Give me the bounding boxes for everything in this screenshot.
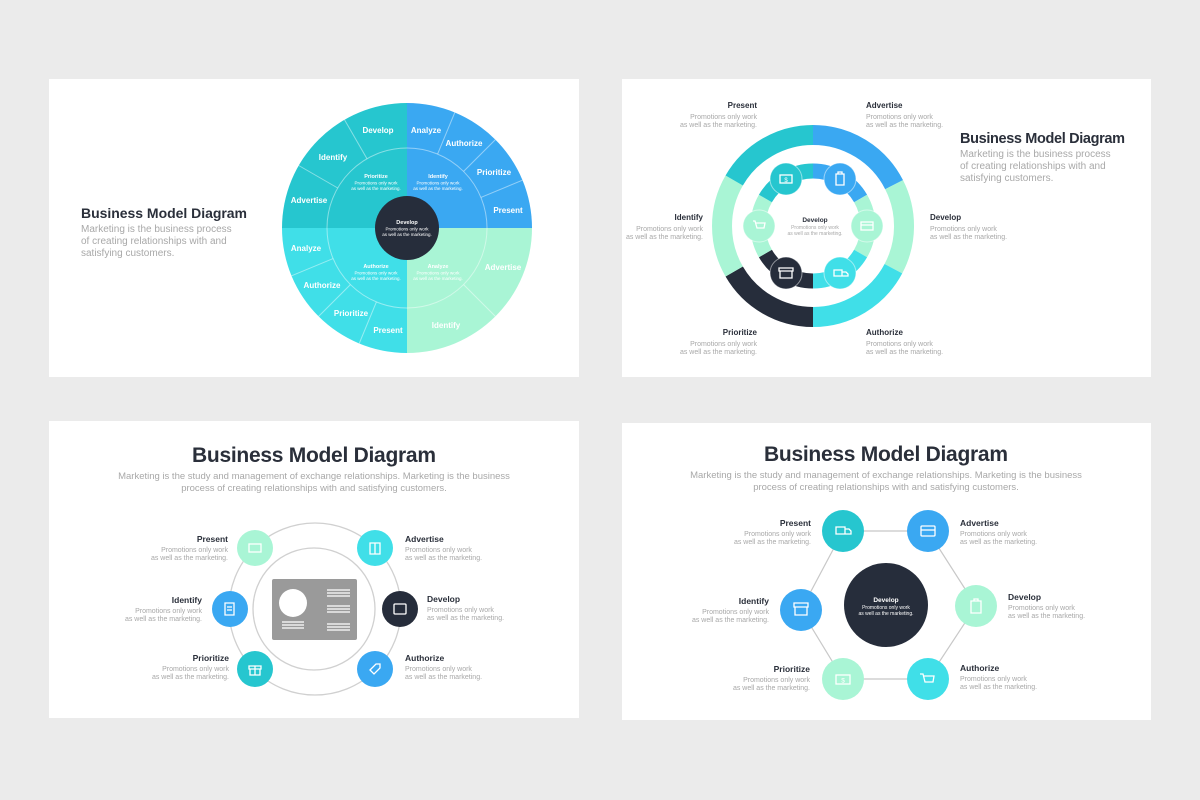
center circle: develop: Develop <box>396 220 418 226</box>
center label: ring: Promotions only work <box>791 225 839 231</box>
panel: hexagon diagram <box>622 423 1151 720</box>
labels: cycle: Promotions only work <box>161 547 228 554</box>
center label: ring <box>787 217 843 237</box>
panel: circle cycle diagram <box>49 421 579 718</box>
chart: wheel: Identify <box>428 174 449 180</box>
labels: ring: as well as the marketing. <box>680 349 757 356</box>
labels: hexagon: Promotions only work <box>702 609 769 616</box>
labels: ring: Promotions only work <box>636 226 703 233</box>
center circle: develop: Promotions only work <box>385 226 429 232</box>
chart: wheel: Analyze <box>291 244 322 253</box>
labels: hexagon: as well as the marketing. <box>960 684 1037 691</box>
chart: wheel: Authorize <box>304 281 341 290</box>
labels: ring: as well as the marketing. <box>626 234 703 241</box>
center label: ring: as well as the marketing. <box>787 231 843 237</box>
labels: hexagon: as well as the marketing. <box>733 685 810 692</box>
center circle: hexagon: Promotions only work <box>862 605 910 611</box>
heading: cycle panel: Marketing is the study and management of exchange relationships. Marketing is the business <box>118 471 510 482</box>
illustration: gray card <box>272 579 357 640</box>
chart: wheel: as well as the marketing. <box>351 186 401 191</box>
labels: hexagon: Promotions only work <box>1008 605 1075 612</box>
labels: ring: as well as the marketing. <box>680 122 757 129</box>
labels: ring <box>626 101 1007 356</box>
heading: wheel panel: Marketing is the business process <box>81 224 232 235</box>
labels: cycle: Promotions only work <box>427 607 494 614</box>
heading: cycle panel <box>118 444 510 494</box>
icon nodes: hexagon: $ <box>841 678 845 684</box>
labels: hexagon <box>692 518 1085 692</box>
labels: cycle: Develop <box>427 594 460 604</box>
labels: hexagon: Prioritize <box>774 664 810 674</box>
labels: hexagon: as well as the marketing. <box>1008 613 1085 620</box>
labels: cycle: as well as the marketing. <box>405 555 482 562</box>
heading: wheel panel: of creating relationships with and <box>81 236 227 247</box>
heading: cycle panel: Business Model Diagram <box>192 444 436 467</box>
center circle: develop: as well as the marketing. <box>382 232 432 237</box>
labels: ring: Identify <box>675 213 704 222</box>
labels: cycle: Promotions only work <box>135 608 202 615</box>
heading: hexagon panel: process of creating relationships with and satisfying customers. <box>753 482 1019 493</box>
labels: hexagon: Promotions only work <box>743 677 810 684</box>
chart: wheel: Promotions only work <box>354 180 398 186</box>
labels: ring: Promotions only work <box>866 341 933 348</box>
chart: wheel: Prioritize <box>334 309 369 318</box>
panel: ring diagram <box>622 79 1151 377</box>
chart: wheel: Identify <box>319 153 348 162</box>
labels: ring: Promotions only work <box>690 341 757 348</box>
labels: ring: Develop <box>930 213 961 222</box>
labels: hexagon: Promotions only work <box>960 676 1027 683</box>
center circle: hexagon: Develop <box>873 597 899 604</box>
labels: cycle: Prioritize <box>193 653 229 663</box>
labels: cycle: as well as the marketing. <box>427 615 504 622</box>
heading: ring panel: of creating relationships with and <box>960 161 1106 172</box>
labels: hexagon: as well as the marketing. <box>734 539 811 546</box>
labels: hexagon: Advertise <box>960 518 999 528</box>
labels: cycle: Present <box>197 534 228 544</box>
labels: ring: Promotions only work <box>930 226 997 233</box>
labels: hexagon: Promotions only work <box>960 531 1027 538</box>
chart: wheel: Prioritize <box>477 168 512 177</box>
chart: cycle circles <box>229 523 401 695</box>
chart: wheel: Develop <box>362 126 394 135</box>
chart: wheel: Analyze <box>411 126 442 135</box>
labels: hexagon: as well as the marketing. <box>960 539 1037 546</box>
icon nodes: cycle <box>212 530 418 687</box>
labels: cycle: as well as the marketing. <box>405 674 482 681</box>
panel: ring diagram: $ <box>784 178 788 184</box>
icon nodes: hexagon <box>780 510 997 700</box>
labels: ring: Promotions only work <box>866 114 933 121</box>
labels: cycle: Promotions only work <box>405 666 472 673</box>
labels: ring: as well as the marketing. <box>866 349 943 356</box>
labels: ring: Advertise <box>866 101 903 110</box>
labels: ring: as well as the marketing. <box>930 234 1007 241</box>
heading: ring panel: Business Model Diagram <box>960 131 1125 147</box>
chart: wheel: Promotions only work <box>416 180 460 186</box>
labels: cycle: as well as the marketing. <box>125 616 202 623</box>
labels: hexagon: Authorize <box>960 663 999 673</box>
chart: wheel: Present <box>493 206 523 215</box>
chart: wheel: Prioritize <box>364 174 388 180</box>
chart: wheel: Identify <box>432 321 461 330</box>
chart: wheel: Advertise <box>291 196 328 205</box>
labels: cycle <box>125 534 504 681</box>
labels: hexagon: Present <box>780 518 811 528</box>
labels: ring: Present <box>728 101 757 110</box>
chart: wheel: as well as the marketing. <box>413 276 463 281</box>
panel: wheel diagram <box>49 79 579 377</box>
chart: wheel: Authorize <box>363 264 389 270</box>
labels: hexagon: Identify <box>739 596 769 606</box>
heading: cycle panel: process of creating relationships with and satisfying customers. <box>181 483 447 494</box>
heading: hexagon panel: Business Model Diagram <box>764 443 1008 466</box>
center label: ring: Develop <box>802 217 828 224</box>
labels: cycle: Authorize <box>405 653 444 663</box>
chart: wheel: Authorize <box>446 139 483 148</box>
chart: outer ring <box>722 135 904 317</box>
heading: hexagon panel <box>690 443 1082 493</box>
center circle: develop <box>375 196 439 260</box>
labels: hexagon: Develop <box>1008 592 1041 602</box>
labels: ring: Prioritize <box>723 328 758 337</box>
heading: wheel panel <box>81 205 247 259</box>
heading: ring panel: Marketing is the business process <box>960 149 1111 160</box>
chart: hexagon lines <box>801 531 976 679</box>
labels: ring: Authorize <box>866 328 903 337</box>
chart: wheel: as well as the marketing. <box>351 276 401 281</box>
labels: hexagon: as well as the marketing. <box>692 617 769 624</box>
icon nodes: ring <box>743 163 883 289</box>
chart: wheel <box>282 103 532 353</box>
labels: cycle: Identify <box>172 595 202 605</box>
chart: wheel: Present <box>373 326 403 335</box>
labels: ring: Promotions only work <box>690 114 757 121</box>
labels: ring: as well as the marketing. <box>866 122 943 129</box>
labels: hexagon: Promotions only work <box>744 531 811 538</box>
heading: wheel panel: satisfying customers. <box>81 248 174 259</box>
labels: cycle: Advertise <box>405 534 444 544</box>
labels: cycle: Promotions only work <box>162 666 229 673</box>
heading: ring panel: satisfying customers. <box>960 173 1053 184</box>
chart: wheel: as well as the marketing. <box>413 186 463 191</box>
center circle: hexagon: as well as the marketing. <box>858 611 914 617</box>
heading: wheel panel: Business Model Diagram <box>81 205 247 221</box>
chart: wheel: Analyze <box>428 264 448 270</box>
chart: wheel: Advertise <box>485 263 522 272</box>
center circle: hexagon <box>844 563 928 647</box>
chart: wheel: Promotions only work <box>416 270 460 276</box>
labels: cycle: Promotions only work <box>405 547 472 554</box>
heading: hexagon panel: Marketing is the study and management of exchange relationships. Marketing is the business <box>690 470 1082 481</box>
heading: ring panel <box>960 131 1125 184</box>
chart: wheel: Promotions only work <box>354 270 398 276</box>
labels: cycle: as well as the marketing. <box>152 674 229 681</box>
labels: cycle: as well as the marketing. <box>151 555 228 562</box>
chart: inner ring <box>758 171 868 281</box>
